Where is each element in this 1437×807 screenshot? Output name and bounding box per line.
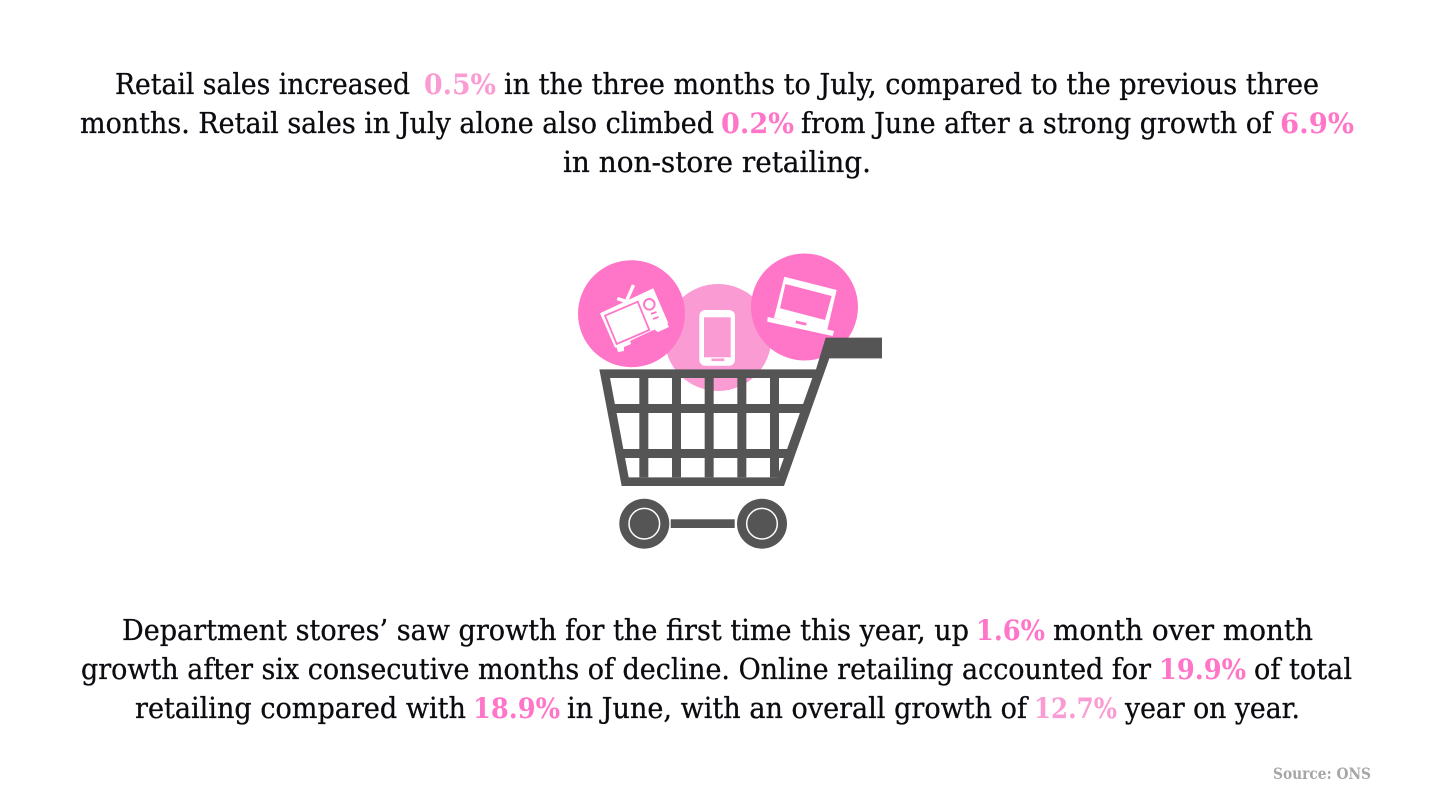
text block: top paragraph [80,67,1354,179]
text block: bottom paragraph: in June, with an overall growth of [567,691,1029,725]
text block: top paragraph: months. Retail sales in July alone also climbed [80,106,714,140]
text block: top paragraph: 0.2% [721,107,794,140]
text block: top paragraph: 6.9% [1280,107,1354,140]
text block: bottom paragraph [81,613,1352,725]
text block: bottom paragraph: 12.7% [1034,692,1117,725]
icon: shopping cart with electronics [578,254,882,549]
text block: bottom paragraph: of total [1254,652,1352,686]
icon: cart basket [599,338,882,486]
text block: bottom paragraph: 1.6% [976,614,1045,647]
icon: television circle [578,260,685,367]
text block: bottom paragraph: 19.9% [1159,653,1246,686]
icon: phone circle [664,284,772,391]
text block: bottom paragraph: growth after six consecutive months of decline. Online retailing accounted for [81,652,1151,686]
text block: top paragraph: from June after a strong growth of [801,106,1274,140]
icon: cart wheels [619,499,787,549]
text block: bottom paragraph: Department stores’ saw growth for the first time this year, up [122,613,969,647]
text block: bottom paragraph: 18.9% [473,692,560,725]
text block: top paragraph: Retail sales increased [115,67,410,101]
text block: bottom paragraph: month over month [1053,613,1313,647]
source note: Source: ONS [1273,764,1371,783]
text block: top paragraph: in the three months to July, compared to the previous three [504,67,1319,101]
icon: laptop circle [751,254,858,360]
text block: top paragraph: in non-store retailing. [563,145,871,179]
text block: bottom paragraph: year on year. [1124,691,1300,725]
text block: top paragraph: 0.5% [424,68,496,101]
text block: bottom paragraph: retailing compared with [135,691,466,725]
